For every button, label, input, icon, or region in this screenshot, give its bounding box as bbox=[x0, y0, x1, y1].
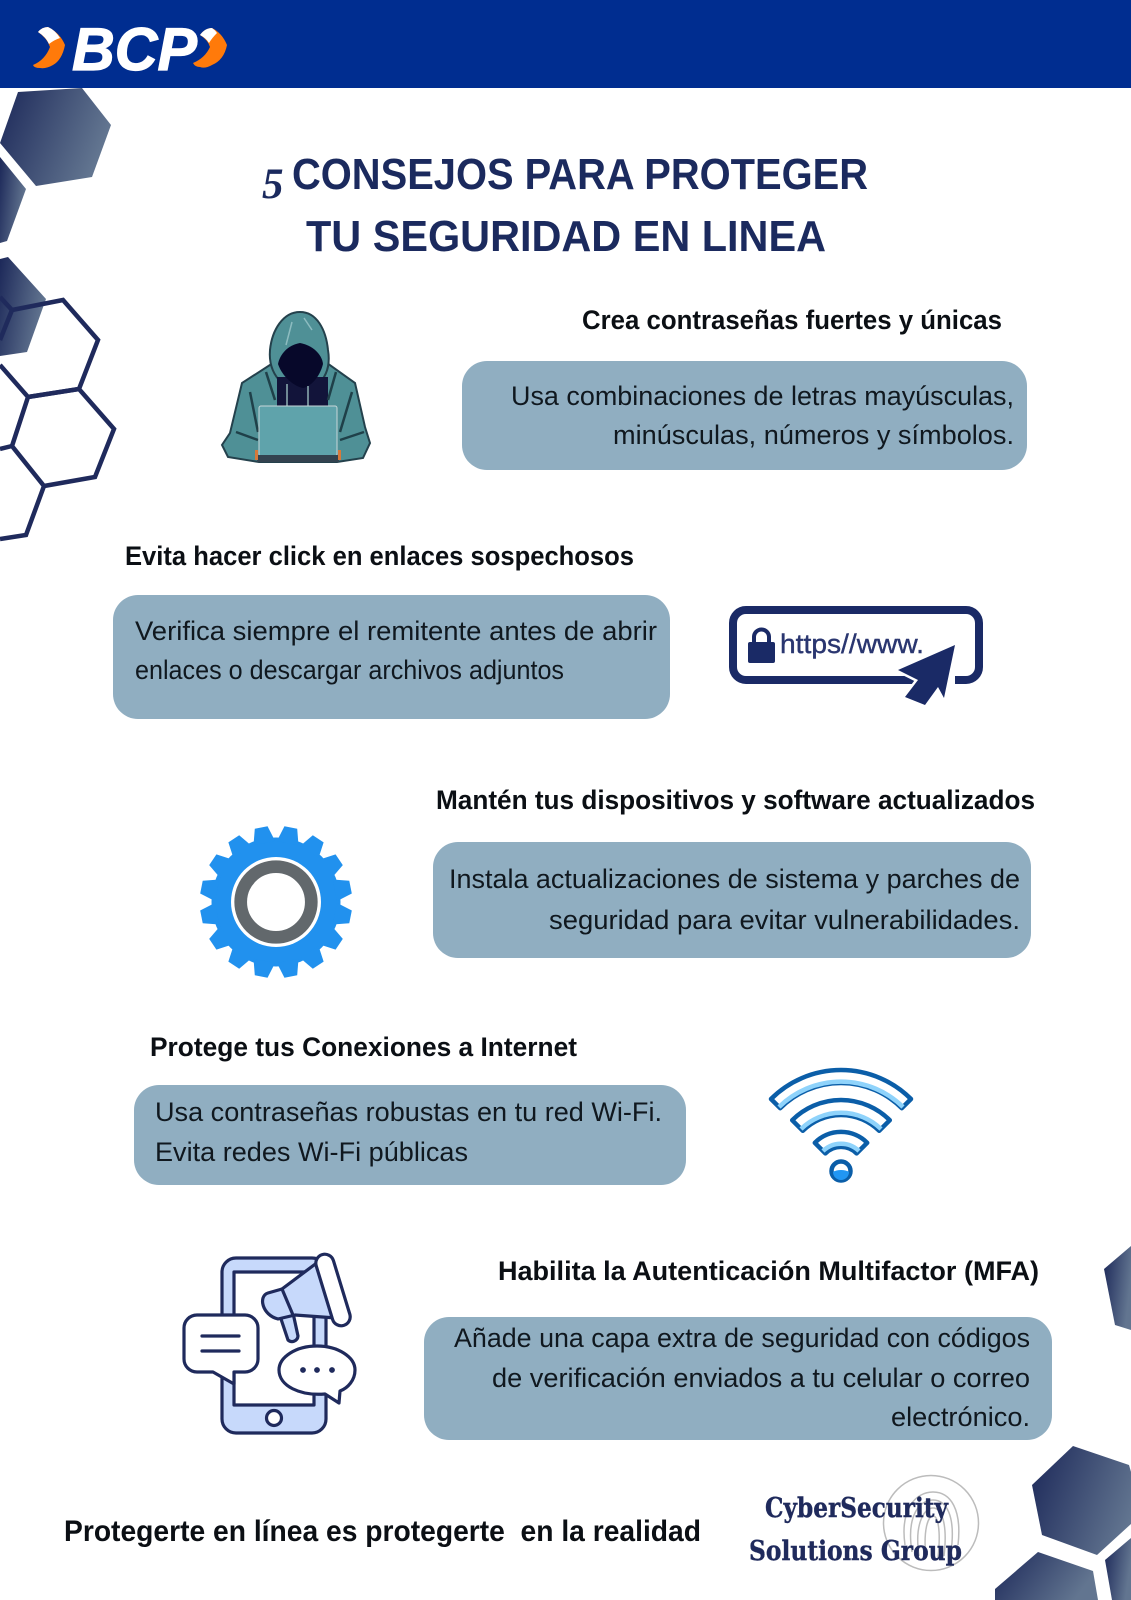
tip 1 panel: minúsculas, números y símbolos. bbox=[613, 420, 1014, 450]
chat bubble right bbox=[279, 1346, 355, 1403]
company logo: CyberSecurity Solutions Group: Solutions Group bbox=[749, 1536, 962, 1567]
icon: wifi bbox=[771, 1070, 911, 1180]
tip 2 bbox=[113, 541, 670, 719]
tip 1 panel bbox=[462, 361, 1027, 470]
tip 1 panel: Usa combinaciones de letras mayúsculas, bbox=[511, 381, 1014, 411]
tip 5 panel bbox=[424, 1317, 1052, 1440]
tip 5 panel: Añade una capa extra de seguridad con códigos bbox=[454, 1323, 1030, 1353]
title: 5 bbox=[262, 161, 284, 208]
tip 4 bbox=[134, 1032, 686, 1185]
tip 2 heading: Evita hacer click en enlaces sospechosos bbox=[125, 541, 634, 571]
title bbox=[262, 150, 868, 261]
header bar with BCP logo bbox=[0, 0, 1131, 88]
icon: hooded hacker at laptop bbox=[222, 312, 370, 462]
tip 2 panel bbox=[113, 595, 670, 719]
decorative hexagons right and bottom right bbox=[995, 1246, 1131, 1600]
logo right chevron bbox=[193, 28, 227, 68]
cursor arrow bbox=[898, 645, 955, 705]
decorative hexagons top left bbox=[0, 88, 114, 539]
tip 1 heading: Crea contraseñas fuertes y únicas bbox=[582, 305, 1002, 335]
tip 4 panel: Usa contraseñas robustas en tu red Wi-Fi. bbox=[155, 1097, 662, 1127]
tip 4 panel bbox=[134, 1085, 686, 1185]
tip 3 panel: seguridad para evitar vulnerabilidades. bbox=[549, 905, 1020, 935]
tip 2 panel: Verifica siempre el remitente antes de abrir bbox=[135, 616, 657, 646]
megaphone bbox=[263, 1252, 352, 1342]
icon: https address bar with cursor bbox=[733, 610, 979, 705]
tip 4 panel: Evita redes Wi-Fi públicas bbox=[155, 1137, 468, 1167]
tip 4 heading: Protege tus Conexiones a Internet bbox=[150, 1032, 577, 1062]
title: CONSEJOS PARA PROTEGER bbox=[292, 150, 868, 199]
closing tagline: Protegerte en línea es protegerte en la realidad bbox=[64, 1515, 701, 1548]
logo wordmark: BCP bbox=[72, 16, 198, 83]
phone body bbox=[222, 1258, 326, 1433]
tip 5 bbox=[424, 1256, 1052, 1440]
tip 5 panel: de verificación enviados a tu celular o correo bbox=[492, 1363, 1030, 1393]
tip 3 panel bbox=[433, 842, 1031, 958]
title: TU SEGURIDAD EN LINEA bbox=[306, 212, 826, 261]
icon: https address bar with cursor: https//www. bbox=[780, 629, 924, 659]
tip 2 panel: enlaces o descargar archivos adjuntos bbox=[135, 655, 564, 685]
tip 5 heading: Habilita la Autenticación Multifactor (MFA) bbox=[498, 1256, 1039, 1286]
logo left chevron bbox=[33, 27, 65, 68]
tip 3 bbox=[433, 785, 1035, 958]
chat bubble left bbox=[184, 1315, 258, 1384]
tip 1 bbox=[462, 305, 1027, 470]
icon: phone with megaphone and chat bubbles bbox=[184, 1252, 355, 1433]
tip 3 panel: Instala actualizaciones de sistema y parches de bbox=[449, 864, 1020, 894]
lock bbox=[748, 630, 775, 663]
company logo: CyberSecurity Solutions Group bbox=[749, 1476, 978, 1570]
tip 5 panel: electrónico. bbox=[891, 1402, 1030, 1432]
company logo: CyberSecurity Solutions Group: CyberSecurity bbox=[765, 1493, 949, 1524]
fingerprint emblem bbox=[884, 1476, 978, 1570]
tip 3 heading: Mantén tus dispositivos y software actualizados bbox=[436, 785, 1035, 815]
icon: gear bbox=[199, 825, 353, 979]
